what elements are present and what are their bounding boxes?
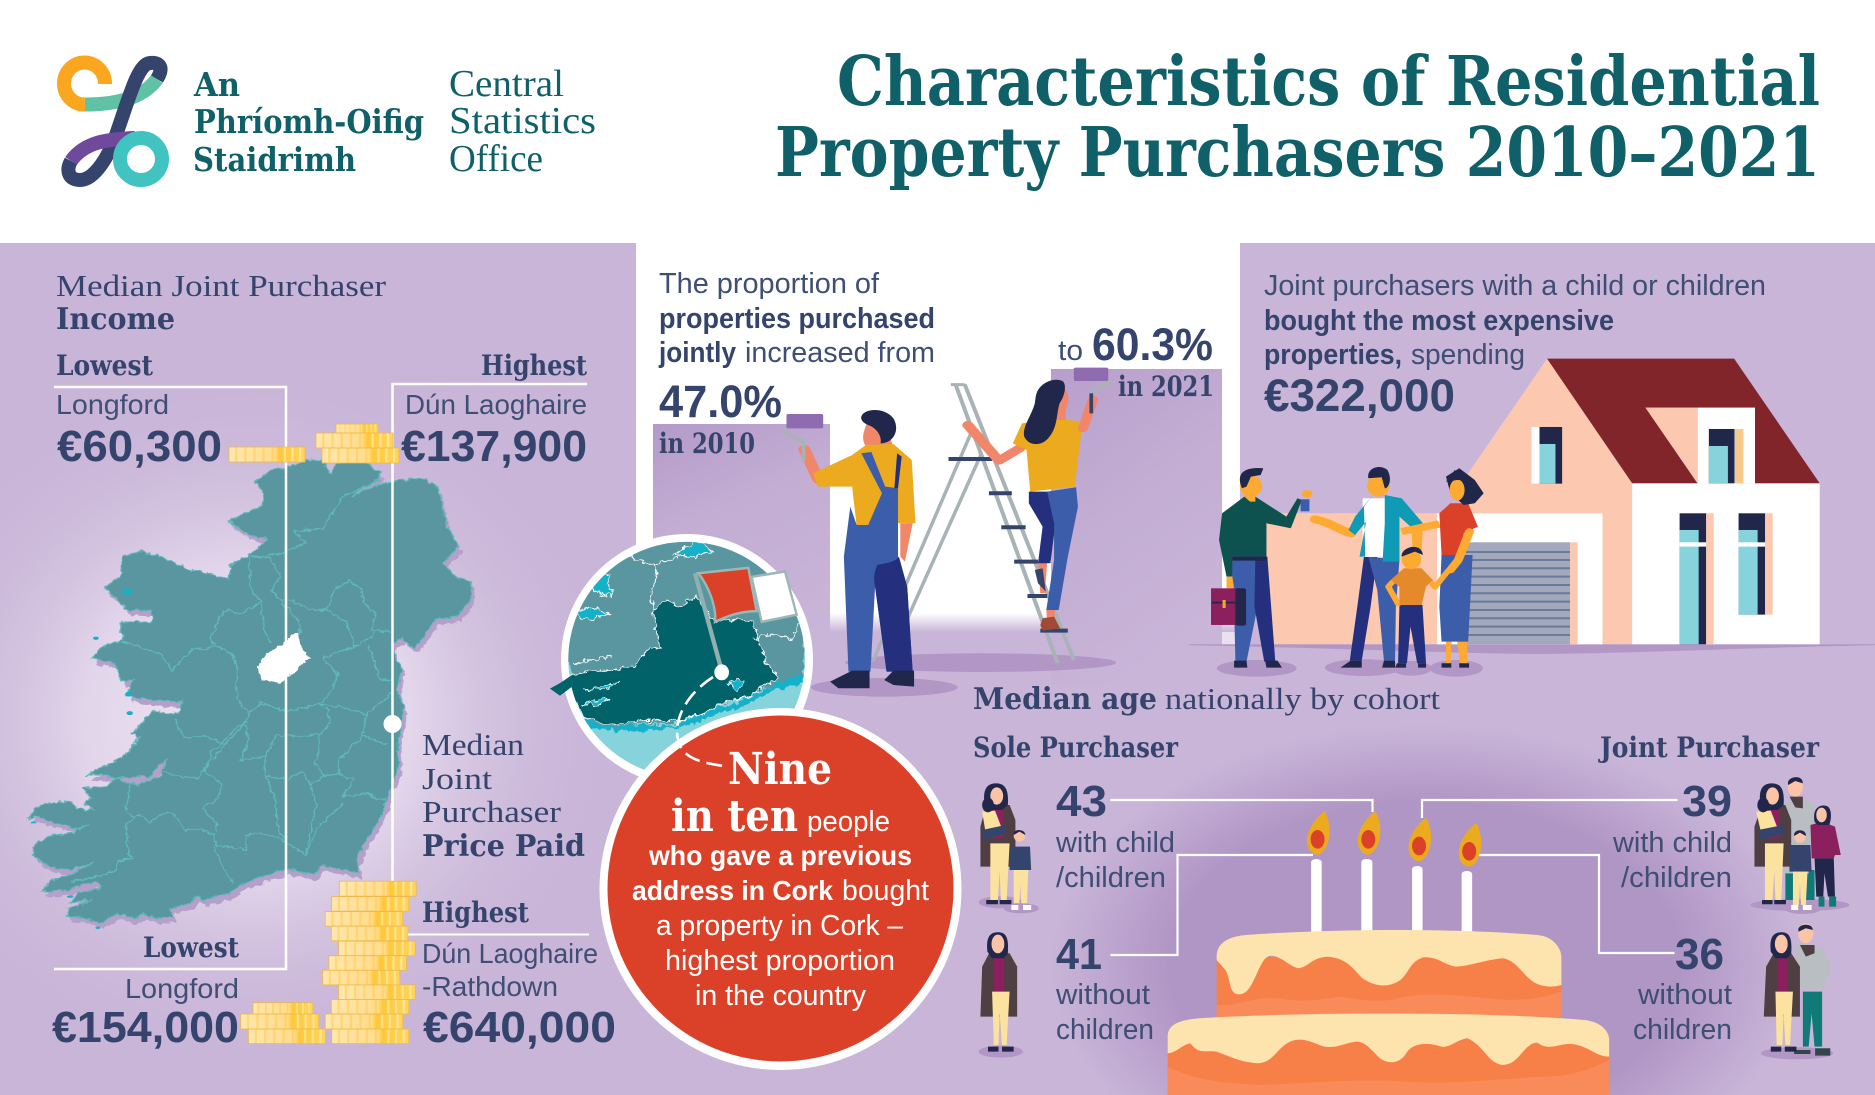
logo English name bbox=[449, 63, 596, 180]
income lowest connector bbox=[54, 387, 286, 969]
joint purchase text bbox=[658, 268, 935, 369]
painted wall 2021 bbox=[1051, 369, 1222, 684]
bottom tier bbox=[1168, 1013, 1609, 1095]
nine in ten text: people bbox=[807, 806, 890, 838]
age 41 label bbox=[1055, 930, 1154, 1046]
age 36 label bbox=[1633, 930, 1732, 1046]
age 39 label: with child bbox=[1612, 827, 1732, 859]
median age heading: Median age bbox=[973, 682, 1157, 717]
logo English name: Central bbox=[449, 63, 564, 105]
house bbox=[1266, 359, 1820, 644]
logo English name: Statistics bbox=[449, 100, 596, 142]
connector lines bbox=[1110, 800, 1678, 955]
joint purchasers without children bbox=[1761, 923, 1833, 1059]
expensive properties text: €322,000 bbox=[1264, 370, 1455, 421]
age 39 label: 39 bbox=[1682, 777, 1732, 826]
47.0% in 2010 bbox=[659, 376, 782, 460]
purple background panel bbox=[0, 243, 1875, 1095]
60.3% in 2021: in 2021 bbox=[1118, 370, 1214, 403]
coins price highest bbox=[323, 881, 416, 1044]
dashed route line bbox=[677, 677, 724, 766]
nine in ten text bbox=[632, 744, 929, 1012]
nine in ten text: address in Cork bbox=[632, 875, 833, 906]
mother bbox=[1402, 468, 1484, 668]
age 43 label: with child bbox=[1055, 827, 1175, 859]
sole purchaser without children bbox=[979, 932, 1023, 1058]
sole purchaser with children bbox=[979, 783, 1039, 913]
Longford highlight bbox=[258, 632, 310, 683]
joint purchaser heading: Joint Purchaser bbox=[1597, 731, 1820, 764]
price highest divider bbox=[408, 934, 589, 936]
expensive properties text bbox=[1264, 270, 1766, 421]
joint purchase text: increased from bbox=[745, 337, 935, 369]
joint purchase text: properties purchased bbox=[659, 303, 935, 335]
median age heading bbox=[973, 681, 1440, 717]
income heading bbox=[56, 268, 387, 337]
coins price lowest bbox=[241, 1003, 326, 1044]
logo Irish name bbox=[193, 65, 424, 179]
flames bbox=[1307, 811, 1481, 867]
nine in ten text: Nine bbox=[728, 744, 832, 795]
nine in ten text: in ten bbox=[671, 791, 798, 842]
Cork map circle bbox=[550, 530, 813, 789]
nine in ten text: bought bbox=[842, 875, 929, 907]
painter woman bbox=[968, 368, 1112, 631]
coins income lowest bbox=[229, 447, 305, 462]
nine in ten text: in the country bbox=[695, 980, 866, 1012]
expensive properties text: bought the most expensive bbox=[1264, 305, 1614, 337]
white strip right fade bbox=[1222, 632, 1240, 646]
logo Irish name: An bbox=[193, 65, 240, 104]
ground bbox=[1189, 644, 1875, 654]
coins income highest bbox=[316, 424, 399, 463]
47.0% in 2010: in 2010 bbox=[659, 427, 755, 460]
age 41 label: 41 bbox=[1056, 930, 1102, 979]
islets bbox=[31, 588, 133, 929]
flag bbox=[695, 568, 797, 680]
price lowest: Longford bbox=[125, 973, 239, 1004]
top tier bbox=[1217, 930, 1561, 1020]
age 39 label bbox=[1612, 777, 1732, 894]
age 43 label: 43 bbox=[1056, 777, 1107, 826]
joint purchasers with children bbox=[1750, 777, 1850, 914]
painter man bbox=[783, 410, 915, 688]
birthday cake bbox=[1168, 811, 1609, 1095]
47.0% in 2010: 47.0% bbox=[659, 376, 782, 427]
white wall fade bbox=[636, 613, 1240, 632]
price highest bbox=[422, 896, 616, 1052]
price paid heading: Purchaser bbox=[422, 794, 562, 829]
income lowest: Lowest bbox=[56, 349, 153, 382]
age 39 label: /children bbox=[1621, 862, 1732, 894]
father bbox=[1315, 467, 1423, 668]
joint purchase text: The proportion of bbox=[659, 268, 880, 300]
price highest: €640,000 bbox=[423, 1003, 616, 1052]
income lowest: €60,300 bbox=[57, 422, 222, 471]
income lowest bbox=[56, 349, 222, 471]
60.3% in 2021 bbox=[1058, 319, 1214, 403]
ladder bbox=[873, 384, 1074, 663]
age 36 label: without bbox=[1637, 979, 1732, 1011]
price highest: Dún Laoghaire bbox=[422, 938, 598, 969]
child bbox=[1388, 547, 1448, 668]
age 41 label: without bbox=[1055, 979, 1150, 1011]
price lowest: Lowest bbox=[143, 931, 239, 964]
cake glow bbox=[1050, 725, 1800, 1095]
60.3% in 2021: to bbox=[1058, 335, 1083, 367]
logo icon bbox=[64, 63, 162, 180]
expensive properties text: Joint purchasers with a child or children bbox=[1264, 270, 1766, 302]
income highest connector bbox=[392, 384, 587, 881]
price paid heading: Joint bbox=[422, 761, 492, 796]
expensive properties text: properties, bbox=[1264, 339, 1402, 371]
price lowest: €154,000 bbox=[52, 1003, 239, 1052]
house and family scene bbox=[1189, 359, 1875, 677]
logo Irish name: Phríomh-Oifig bbox=[194, 102, 424, 141]
logo English name: Office bbox=[449, 138, 543, 180]
age 43 label: /children bbox=[1056, 862, 1166, 894]
map of Ireland bbox=[28, 460, 475, 929]
income highest bbox=[401, 349, 587, 471]
price paid heading: Median bbox=[422, 727, 525, 762]
joint purchase text: jointly bbox=[658, 337, 736, 369]
nine in ten text: highest proportion bbox=[665, 945, 895, 977]
income highest: Highest bbox=[481, 349, 587, 382]
income heading: Median Joint Purchaser bbox=[56, 268, 387, 303]
price paid heading bbox=[422, 727, 585, 864]
age 41 label: children bbox=[1056, 1014, 1154, 1046]
price dot on map bbox=[384, 715, 402, 733]
family shadows bbox=[1217, 659, 1483, 677]
expensive properties text: spending bbox=[1411, 339, 1525, 371]
painter scene bbox=[783, 368, 1116, 697]
nine in ten text: a property in Cork – bbox=[656, 910, 904, 942]
logo Irish name: Staidrimh bbox=[193, 140, 356, 179]
median age heading: nationally by cohort bbox=[1165, 681, 1440, 716]
price highest: Highest bbox=[422, 896, 529, 929]
seller with briefcase bbox=[1211, 468, 1313, 668]
nine in ten text: who gave a previous bbox=[648, 840, 912, 871]
age 36 label: children bbox=[1633, 1014, 1732, 1046]
white centre wall bbox=[636, 243, 1240, 613]
title bbox=[775, 42, 1820, 193]
income lowest: Longford bbox=[56, 389, 169, 420]
sole purchaser heading: Sole Purchaser bbox=[973, 731, 1179, 764]
price lowest bbox=[52, 931, 239, 1052]
candles bbox=[1311, 859, 1472, 934]
map glow bbox=[0, 375, 620, 1065]
age 36 label: 36 bbox=[1675, 930, 1724, 979]
60.3% in 2021: 60.3% bbox=[1092, 319, 1213, 370]
painted wall 2010 bbox=[653, 424, 830, 684]
price paid heading: Price Paid bbox=[422, 829, 585, 864]
income heading: Income bbox=[56, 302, 175, 337]
income highest: €137,900 bbox=[401, 422, 587, 471]
age 43 label bbox=[1055, 777, 1175, 894]
income highest: Dún Laoghaire bbox=[405, 389, 587, 420]
red callout circle bbox=[600, 708, 962, 1070]
price highest: -Rathdown bbox=[422, 971, 558, 1002]
